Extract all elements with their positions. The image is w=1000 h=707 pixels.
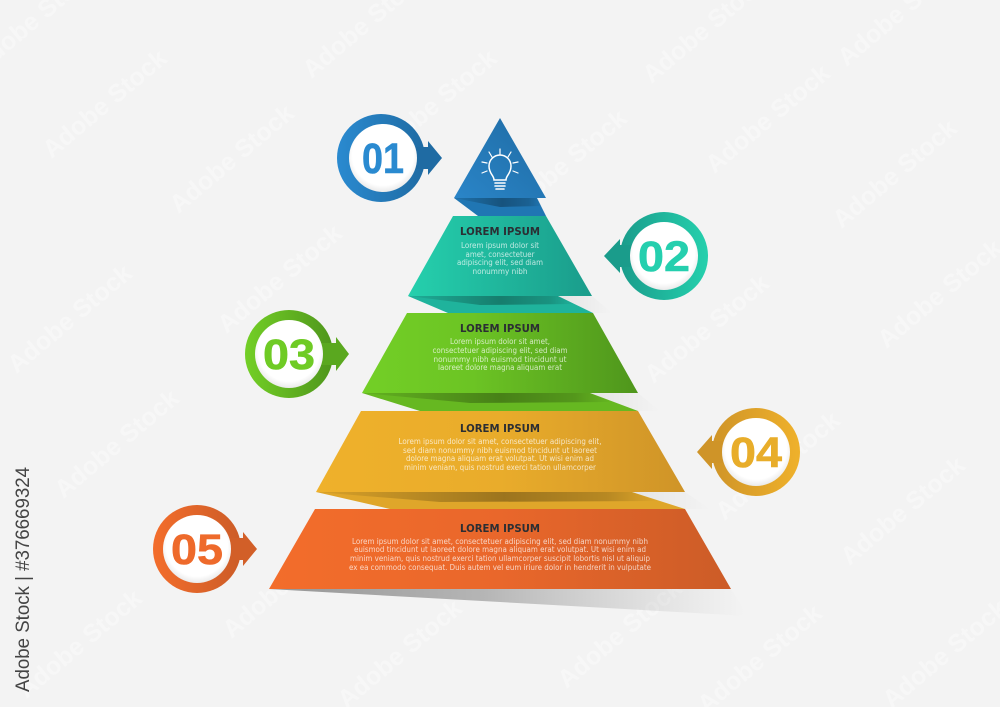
watermarks: Adobe Stock — [639, 269, 774, 389]
badge 01 — [337, 114, 442, 202]
fold: tier 2 — [408, 296, 612, 313]
tier 4 heading: LOREM IPSUM — [460, 423, 540, 435]
tier 2 panel — [408, 216, 592, 296]
icon: light bulb — [482, 149, 518, 189]
tier 1: triangle with bulb — [454, 118, 546, 198]
watermarks: Adobe Stock — [497, 104, 632, 224]
watermarks: Adobe Stock — [164, 99, 299, 219]
fold: tier 3 — [362, 393, 660, 411]
tier 5 heading: LOREM IPSUM — [460, 523, 540, 535]
watermarks: Adobe Stock — [827, 114, 962, 234]
watermarks: Adobe Stock — [835, 451, 970, 571]
tier 2 body: nonummy nibh — [472, 267, 528, 276]
ground shadow — [269, 589, 748, 616]
badge 04 — [697, 408, 800, 496]
badge 03: 03 — [263, 331, 315, 379]
tier 2 heading: LOREM IPSUM — [460, 226, 540, 238]
badge 02: 02 — [638, 233, 690, 281]
watermarks: Adobe Stock — [367, 44, 502, 164]
tier 3 body: consectetuer adipiscing elit, sed diam — [432, 346, 568, 355]
fold: tier 1 — [454, 198, 546, 216]
tier 2 body — [457, 241, 543, 276]
tier 5 body: minim veniam, quis nostrud exerci tation ullamcorper suscipit lobortis nisl ut aliquip — [350, 554, 650, 563]
tier 2 body: amet, consectetuer — [466, 250, 535, 259]
fold: tier 4 — [316, 492, 710, 509]
tier 3 panel — [362, 313, 638, 393]
tier 4 body: minim veniam, quis nostrud exerci tation ullamcorper — [404, 463, 597, 472]
tier 5 body: Lorem ipsum dolor sit amet, consectetuer adipiscing elit, sed diam nonummy nibh — [352, 537, 648, 546]
tier 4 body: Lorem ipsum dolor sit amet, consectetuer adipiscing elit, — [398, 437, 602, 446]
tier 4 body: dolore magna aliquam erat volutpat. Ut wisi enim ad — [406, 454, 594, 463]
tier 5 panel — [269, 509, 731, 589]
tier 3 heading: LOREM IPSUM — [460, 323, 540, 335]
watermarks: Adobe Stock — [212, 219, 347, 339]
watermarks: Adobe Stock — [49, 384, 184, 504]
badge 04: 04 — [730, 429, 782, 477]
badge 03 — [245, 310, 349, 398]
tier 2 body: adipiscing elit, sed diam — [457, 258, 543, 267]
tier 5 body: euismod tincidunt ut laoreet dolore magna aliquam erat volutpat. Ut wisi enim ad — [354, 545, 646, 554]
tier 3 body — [432, 337, 568, 372]
watermarks: Adobe Stock — [37, 44, 172, 164]
badge 02 — [604, 212, 708, 300]
watermarks: Adobe Stock — [2, 259, 137, 379]
tier 5 body — [349, 537, 651, 572]
badge 05 — [153, 505, 257, 593]
badge 05: 05 — [171, 526, 223, 574]
tier 4 panel — [316, 411, 685, 492]
tier 3 body: nonummy nibh euismod tincidunt ut — [434, 355, 566, 364]
watermarks: Adobe Stock — [12, 584, 147, 704]
watermarks: Adobe Stock — [710, 406, 845, 526]
tier 4 body: sed diam nonummy nibh euismod tincidunt ut laoreet — [403, 446, 597, 455]
watermarks: Adobe Stock — [217, 524, 352, 644]
tier 3 body: Lorem ipsum dolor sit amet, — [450, 337, 550, 346]
stock id caption: Adobe Stock | #376669324 — [13, 467, 34, 692]
badge 01: 01 — [362, 135, 404, 183]
tier 3 body: laoreet dolore magna aliquam erat — [438, 363, 562, 372]
tier 4 body — [398, 437, 602, 472]
tier 2 body: Lorem ipsum dolor sit — [461, 241, 539, 250]
watermarks: Adobe Stock — [552, 574, 687, 694]
watermarks: Adobe Stock — [700, 59, 835, 179]
tier 5 body: ex ea commodo consequat. Duis autem vel eum iriure dolor in hendrerit in vulputate — [349, 563, 651, 572]
